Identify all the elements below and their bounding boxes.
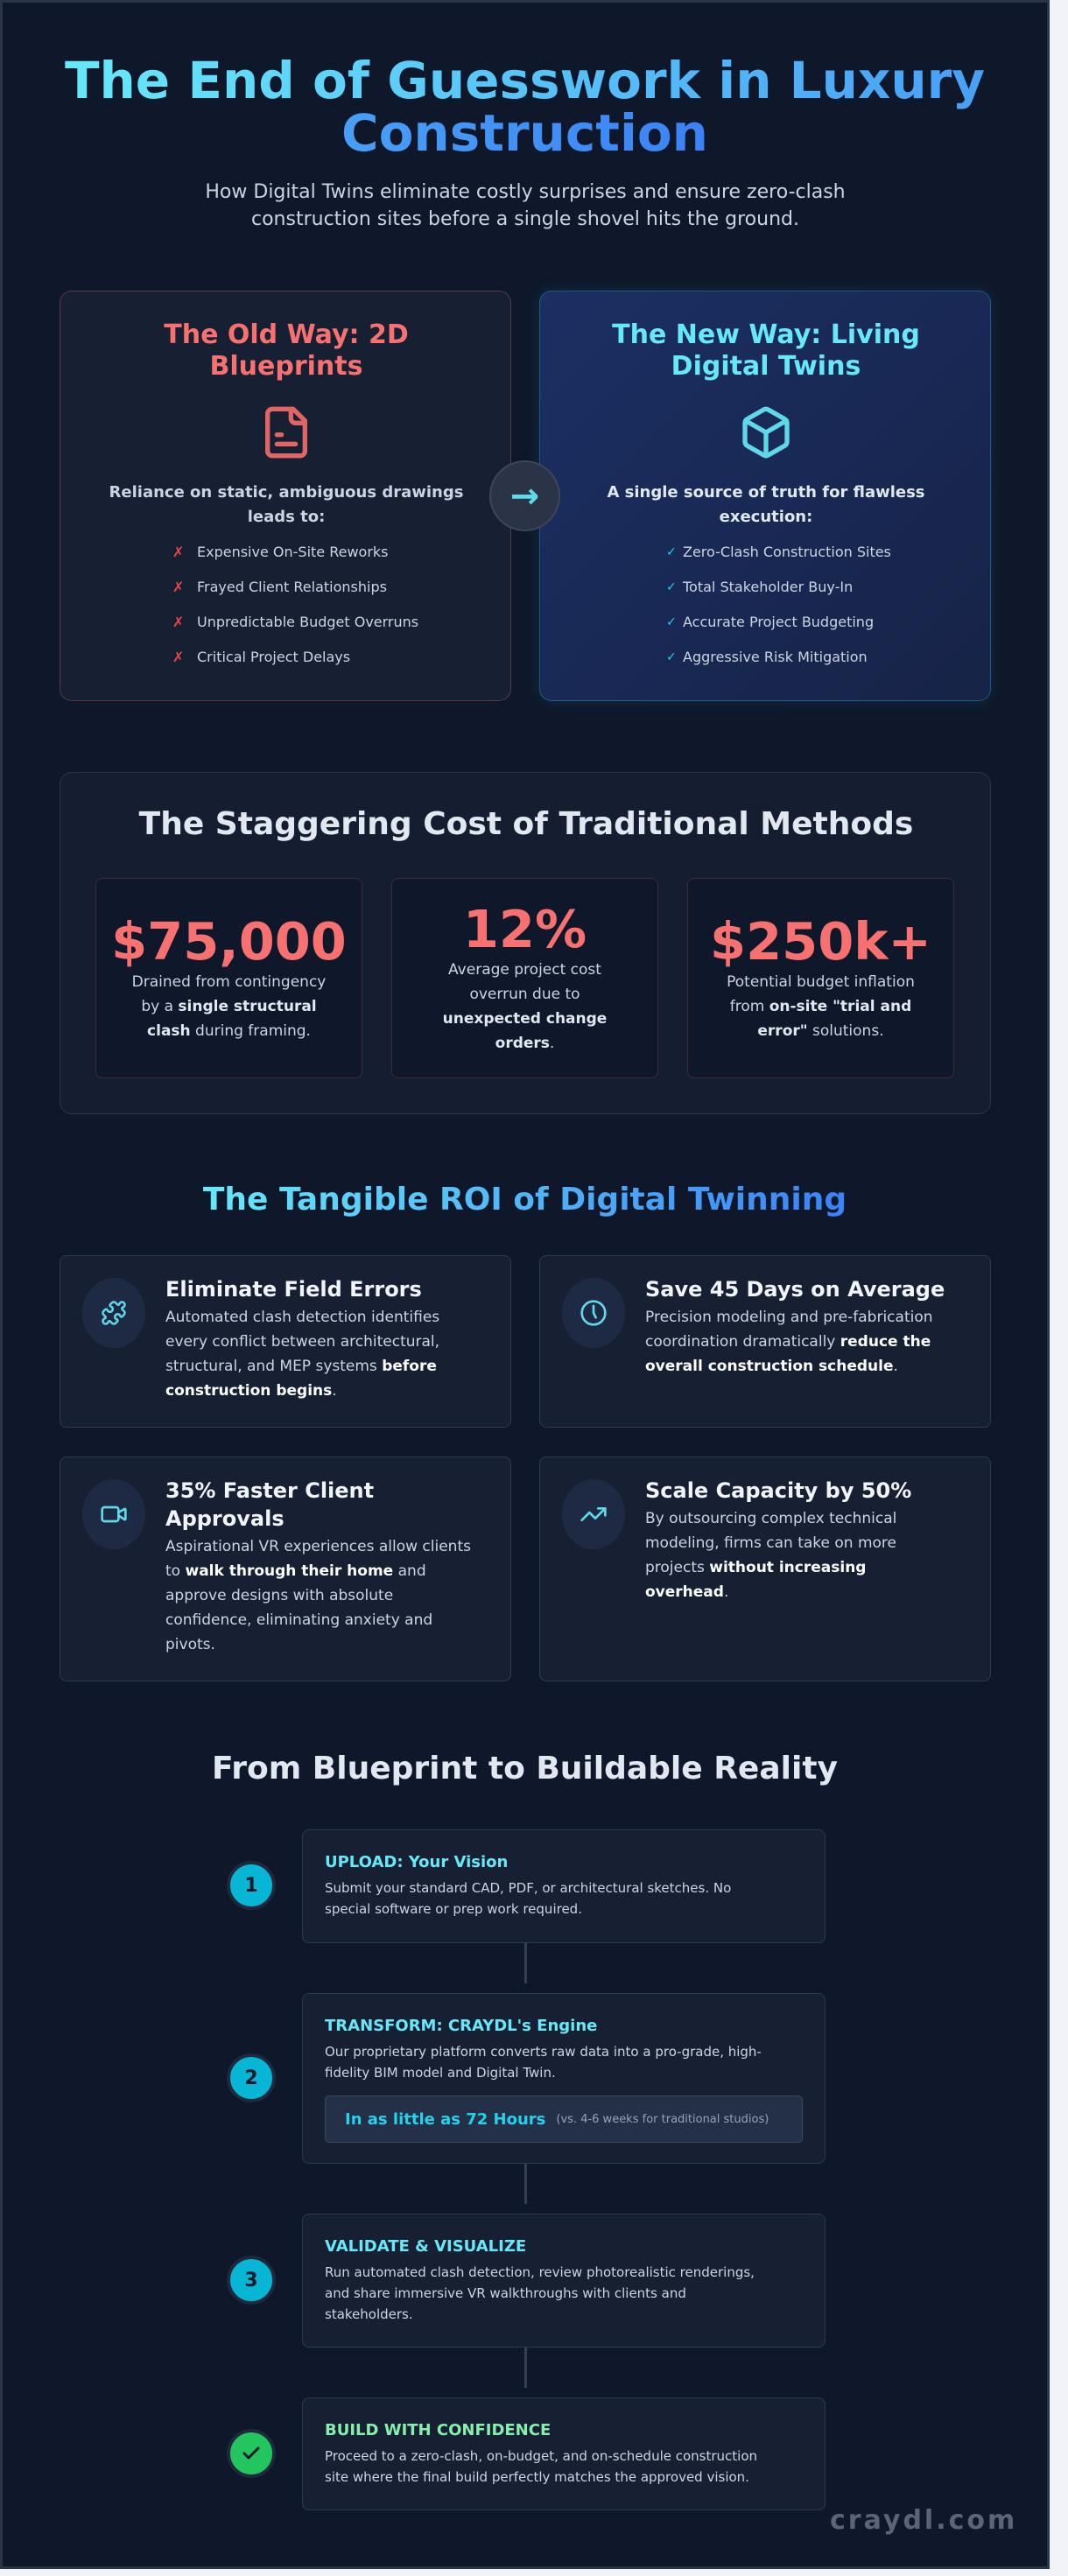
- heading: old way: Blueprints: [210, 351, 362, 382]
- step 4: Proceed to a zero-clash, on-budget, and on-schedule construction site where the final build perfectly matches the approved vision.: [325, 2448, 757, 2485]
- stat: 250k: [687, 878, 954, 1078]
- heading: ROI: The Tangible ROI of Digital Twinning: [203, 1182, 847, 1218]
- callout: 72 hours: [325, 2095, 803, 2143]
- list: benefits: ✓: [666, 580, 677, 594]
- badge 2: 2: [244, 2067, 258, 2088]
- text: scale: Scale Capacity by 50%: [645, 1478, 911, 1503]
- list: problems: Unpredictable Budget Overruns: [197, 614, 418, 630]
- badge 1: [227, 1861, 276, 1910]
- icon: puzzle: [82, 1278, 145, 1348]
- list: benefits: ✓: [666, 650, 677, 664]
- icon: video: [82, 1479, 145, 1549]
- heading: cost: The Staggering Cost of Traditional Methods: [139, 806, 913, 842]
- card: scale capacity: [539, 1456, 991, 1681]
- heading: new way: Digital Twins: [671, 351, 861, 382]
- text: approvals: Aspirational VR experiences allow clients to walk through their home and approve designs with absolute confidence, eliminating anxiety and pivots.: [165, 1538, 471, 1653]
- list: problems: Expensive On-Site Reworks: [197, 544, 389, 560]
- list: benefits: ✓: [666, 545, 677, 559]
- text: old way intro: Reliance on static, ambiguous drawings leads to:: [109, 483, 463, 526]
- card: eliminate field errors: [60, 1255, 511, 1428]
- heading: new way: The New Way: Living: [612, 319, 920, 350]
- badge 3: [227, 2256, 276, 2305]
- list: problems: ✗: [172, 649, 184, 665]
- stat: 12%: Average project cost overrun due to unexpected change orders.: [443, 961, 607, 1052]
- text: approvals: [165, 1478, 471, 1653]
- title: The End of Guesswork in Luxury: [65, 51, 985, 110]
- stat: 75000: [95, 878, 362, 1078]
- step 1: UPLOAD: Your Vision: [325, 1853, 508, 1871]
- step 3: [302, 2214, 826, 2348]
- stat: 75000: Drained from contingency by a single structural clash during framing.: [132, 973, 326, 1040]
- text: scale: By outsourcing complex technical modeling, firms can take on more projects without increasing overhead.: [645, 1510, 896, 1601]
- text: 45 days: Save 45 Days on Average: [645, 1277, 945, 1302]
- badge 1: 1: [244, 1875, 258, 1896]
- callout: 72 hours: (vs. 4-6 weeks for traditional studios): [556, 2113, 769, 2125]
- stat: 250k: $250k+: [710, 910, 931, 972]
- list: problems: Frayed Client Relationships: [197, 579, 387, 595]
- list: benefits: Aggressive Risk Mitigation: [683, 649, 868, 665]
- panel: old way: [60, 291, 511, 701]
- subtitle: How Digital Twins eliminate costly surprises and ensure zero-clash construction sites before a single shovel hits the ground.: [205, 181, 846, 230]
- badge 3: 3: [244, 2269, 258, 2292]
- callout: 72 hours: In as little as 72 Hours: [345, 2109, 545, 2129]
- step 2: TRANSFORM: CRAYDL's Engine: [325, 2017, 597, 2035]
- footer: brand: craydl.com: [830, 2505, 1017, 2536]
- badge 2: [227, 2053, 276, 2102]
- list: problems: [172, 544, 418, 665]
- text: 45 days: Precision modeling and pre-fabrication coordination dramatically reduce the overall construction schedule.: [645, 1309, 933, 1375]
- list: benefits: ✓: [666, 615, 677, 629]
- list: problems: Critical Project Delays: [197, 649, 350, 665]
- stat: 12%: [391, 878, 658, 1078]
- icon: trending up: [562, 1479, 625, 1549]
- text: approvals: 35% Faster Client Approvals: [165, 1478, 374, 1531]
- list: problems: ✗: [172, 614, 184, 630]
- heading: old way: [164, 319, 409, 382]
- step 3: VALIDATE & VISUALIZE: [325, 2237, 526, 2256]
- step 2: Our proprietary platform converts raw data into a pro-grade, high-fidelity BIM model and Digital Twin.: [325, 2044, 762, 2081]
- text: new way intro: A single source of truth for flawless execution:: [607, 483, 925, 526]
- list: benefits: Total Stakeholder Buy-In: [683, 579, 853, 595]
- step 4: BUILD WITH CONFIDENCE: [325, 2421, 551, 2439]
- list: problems: ✗: [172, 544, 184, 560]
- title: Construction: [341, 103, 708, 163]
- heading: new way: [612, 319, 920, 382]
- panel: cost: [60, 772, 991, 1114]
- stat: 12%: 12%: [463, 898, 587, 959]
- step 3: Run automated clash detection, review photorealistic renderings, and share immersive VR walkthroughs with clients and stakeholders.: [325, 2264, 755, 2322]
- arrow: old to new: [489, 460, 560, 531]
- step 1: [302, 1829, 826, 1943]
- title: [65, 51, 985, 163]
- list: benefits: [666, 544, 891, 665]
- panel: new way: [539, 291, 991, 701]
- step 2: [302, 1993, 826, 2164]
- step 4: [302, 2397, 826, 2510]
- list: benefits: Zero-Clash Construction Sites: [683, 544, 891, 560]
- text: field errors: Automated clash detection identifies every conflict between architectural, structural, and MEP systems before construction begins.: [165, 1309, 439, 1400]
- text: field errors: Eliminate Field Errors: [165, 1277, 422, 1302]
- icon: clock: [562, 1278, 625, 1348]
- icon: document: [265, 406, 307, 459]
- text: 45 days: [645, 1277, 945, 1375]
- card: faster approvals: [60, 1456, 511, 1681]
- step 1: Submit your standard CAD, PDF, or architectural sketches. No special software or prep work required.: [325, 1880, 731, 1917]
- heading: old way: The Old Way: 2D: [164, 319, 409, 350]
- icon: cube: [742, 406, 790, 459]
- stat: 75000: $75,000: [111, 910, 347, 972]
- badge: check: [227, 2429, 276, 2478]
- list: benefits: Accurate Project Budgeting: [683, 614, 874, 630]
- arrow: old to new: →: [510, 476, 539, 516]
- stat: 250k: Potential budget inflation from on-site "trial and error" solutions.: [727, 973, 915, 1040]
- heading: process: From Blueprint to Buildable Reality: [212, 1751, 838, 1786]
- card: save 45 days: [539, 1255, 991, 1428]
- list: problems: ✗: [172, 579, 184, 595]
